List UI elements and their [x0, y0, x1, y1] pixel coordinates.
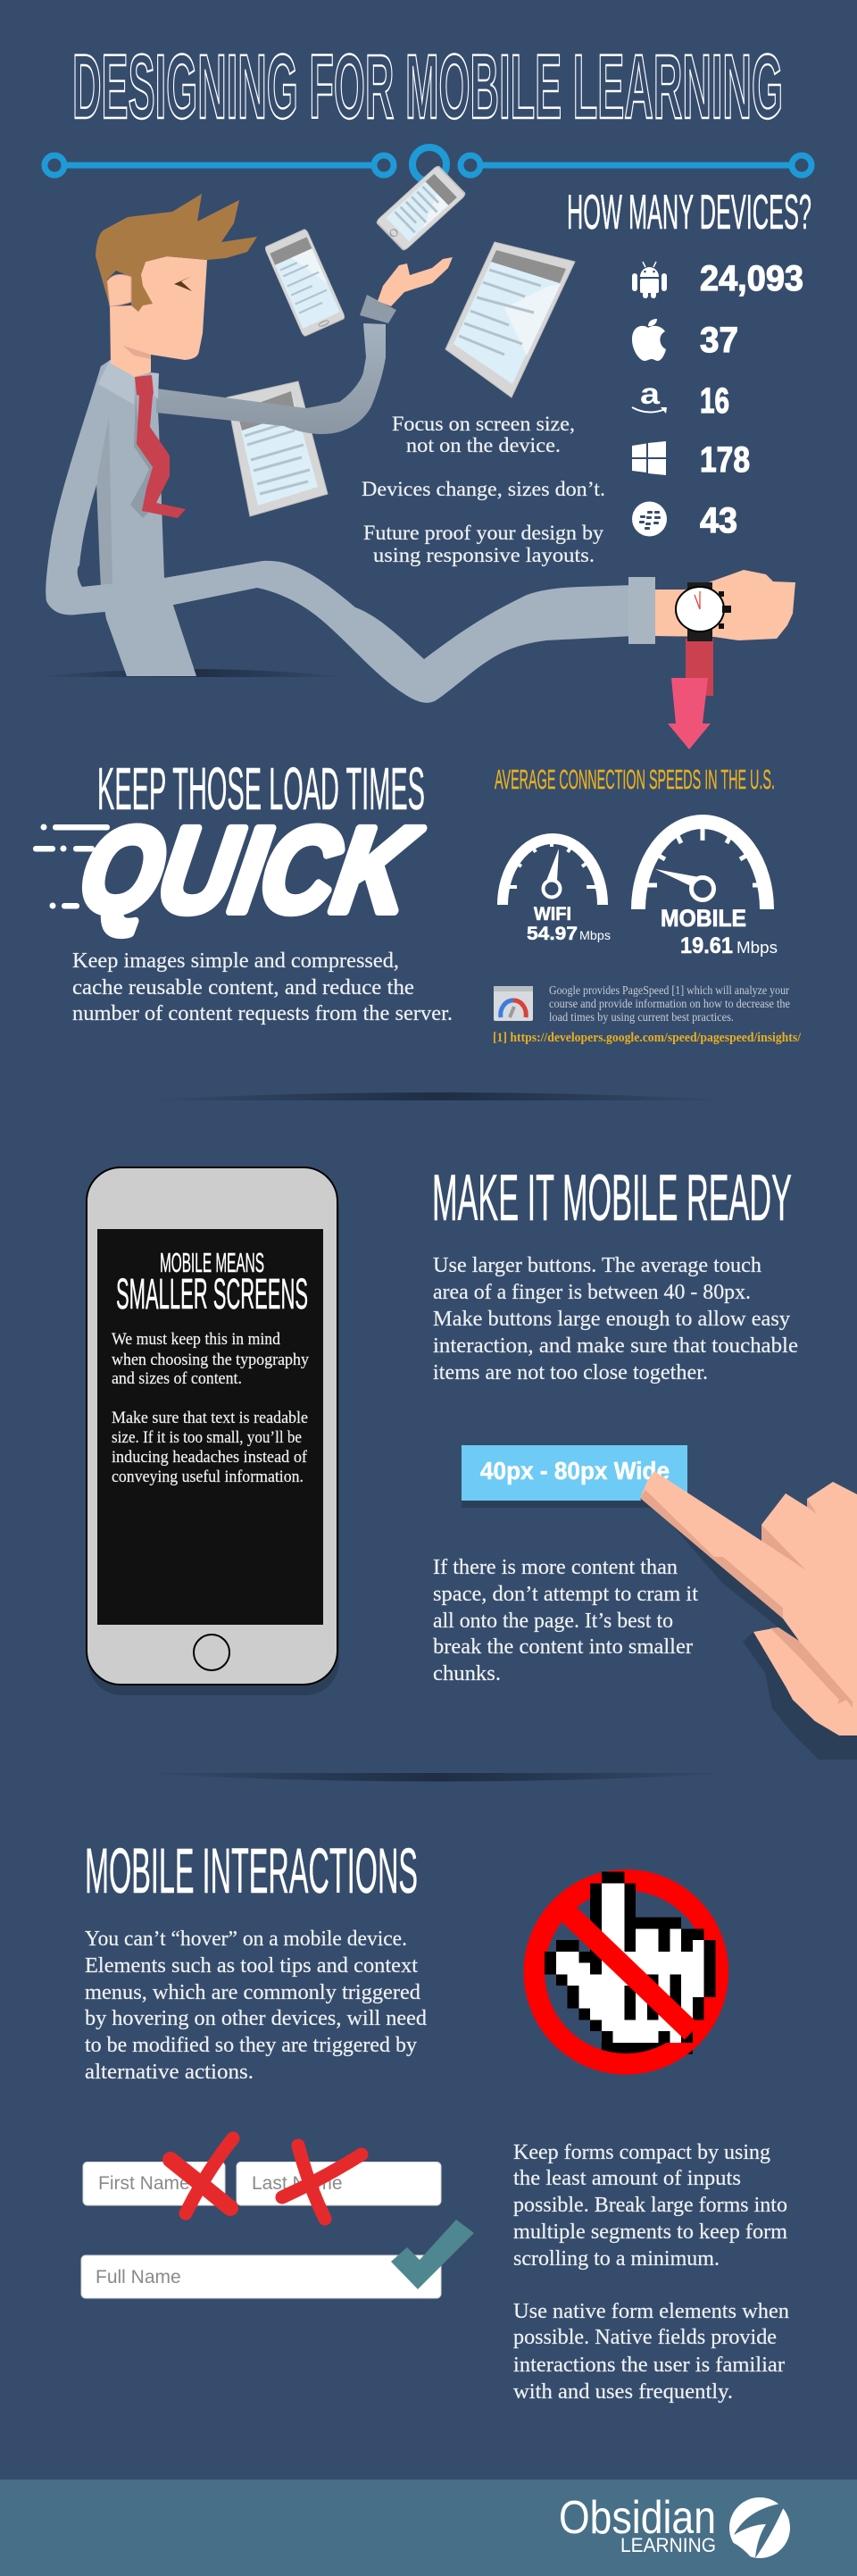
phone screen [97, 1229, 323, 1625]
value: mobile [680, 933, 778, 958]
icon: android [632, 262, 667, 298]
illustration: phone floating left [264, 229, 345, 337]
button example: 40px - 80px Wide [480, 1457, 670, 1485]
text block: larger buttons: Use larger buttons. The average touch [433, 1254, 761, 1277]
infographic canvas: KEEP THOSE LOAD TIMES [97, 756, 425, 823]
text block: hover: menus, which are commonly triggered [85, 1981, 420, 2004]
text block: hover: alternative actions. [85, 2061, 254, 2084]
text block: typography: when choosing the typography [112, 1351, 309, 1369]
text block: readable size: size. If it is too small, you’ll be [112, 1428, 302, 1447]
text block: more content than space: all onto the page. It’s best to [433, 1610, 673, 1633]
input: first name: First Name [98, 2173, 190, 2194]
raised arm [156, 323, 386, 434]
phone mockup [87, 1167, 339, 1695]
wordmark: LEARNING [620, 2534, 716, 2556]
text block: more content than space: break the content into smaller [433, 1635, 693, 1659]
text block: larger buttons: Make buttons large enough to allow easy [433, 1308, 790, 1331]
tie [135, 375, 186, 518]
check mark [391, 2220, 474, 2289]
label: mobile: MOBILE [661, 905, 746, 932]
text block: native form elements: Use native form elements when [513, 2300, 789, 2323]
watch [676, 582, 731, 641]
form example: split name fields [83, 2138, 441, 2219]
link: pagespeed url: [1] https://developers.google.com/speed/pagespeed/insights/ [493, 1031, 802, 1045]
title rule with rings [45, 147, 811, 181]
text block: focus on screen size: not on the device. [406, 434, 561, 456]
text block: native form elements [513, 2300, 789, 2404]
fist [655, 570, 795, 640]
footer logo [559, 2492, 790, 2558]
count: android: 24,093 [700, 259, 803, 298]
text block: larger buttons: items are not too close together. [433, 1361, 708, 1384]
footer band [0, 2480, 857, 2576]
text block: compact forms: multiple segments to keep form [513, 2221, 787, 2244]
watch strap [686, 639, 713, 696]
hand shading [640, 1490, 853, 1708]
text block: native form elements: possible. Native fields provide [513, 2326, 777, 2349]
left arm wrapping to the right [46, 366, 634, 703]
text block: pagespeed note: course and provide information on how to decrease the [549, 998, 790, 1011]
text block: typography [112, 1330, 309, 1388]
count: windows: 178 [700, 440, 750, 480]
input: last name [237, 2162, 441, 2205]
arm cuff [360, 295, 396, 323]
text block: focus on screen size [362, 413, 605, 566]
illustration: tablet behind arm [227, 381, 328, 516]
gauge: mobile [638, 822, 778, 958]
phone mockup: SMALLER SCREENS [116, 1271, 308, 1318]
text block: compact forms: possible. Break large forms into [513, 2194, 787, 2217]
text block: compact forms: scrolling to a minimum. [513, 2247, 720, 2271]
text block: readable size [112, 1409, 308, 1486]
text block: keep images simple: Keep images simple and compressed, [72, 949, 399, 973]
input: last name: Last Name [252, 2173, 343, 2194]
chin shadow [123, 346, 151, 359]
text block: readable size: Make sure that text is readable [112, 1409, 308, 1427]
text block: more content than space: chunks. [433, 1662, 501, 1685]
label: wifi: WIFI [534, 904, 571, 924]
gauge: wifi [503, 838, 611, 944]
value: mobile: 19.61 [680, 933, 733, 958]
text block: focus on screen size: Future proof your design by [363, 522, 604, 544]
hand shadows [640, 1498, 857, 1760]
collar [98, 360, 159, 405]
value: mobile: Mbps [736, 939, 778, 957]
arrow: pointer downward [668, 678, 711, 749]
icon: amazon: a [640, 377, 661, 410]
neck and face [110, 256, 207, 377]
text block: compact forms [513, 2141, 787, 2271]
text block: native form elements: interactions the user is familiar [513, 2354, 785, 2377]
text block: more content than space: space, don’t attempt to cram it [433, 1583, 698, 1606]
text block: typography: and sizes of content. [112, 1369, 242, 1388]
text block: pagespeed note: Google provides PageSpeed [1] which will analyze your [549, 984, 789, 998]
count: blackberry: 43 [700, 501, 737, 540]
text block: larger buttons: area of a finger is between 40 - 80px. [433, 1281, 751, 1304]
infographic canvas: MOBILE INTERACTIONS [85, 1836, 418, 1907]
heading: quick with speed lines: QUICK [71, 803, 428, 937]
icon: windows [632, 441, 666, 475]
form example: full name field: Full Name [96, 2267, 181, 2287]
phone screen: MOBILE MEANS [160, 1247, 264, 1278]
text block: hover [85, 1928, 427, 2084]
form example: full name field [81, 2220, 474, 2298]
text block: readable size: inducing headaches instead of [112, 1448, 308, 1467]
illustration: phone floating top [376, 165, 466, 251]
device counts list [632, 259, 803, 540]
cuff [628, 577, 655, 644]
text block: native form elements: with and uses frequently. [513, 2380, 733, 2404]
text block: pagespeed note [549, 984, 790, 1025]
eye [174, 276, 192, 291]
count: apple: 37 [700, 321, 738, 360]
text block: hover: to be modified so they are triggered by [85, 2034, 417, 2057]
text block: compact forms: Keep forms compact by using [513, 2141, 770, 2164]
red cross: first [171, 2138, 233, 2213]
text block: focus on screen size: using responsive layouts. [373, 544, 595, 566]
text block: pagespeed note: load times by using current best practices. [549, 1011, 734, 1025]
text block: keep images simple: cache reusable content, and reduce the [72, 976, 414, 999]
icon: amazon [632, 377, 667, 414]
text block: keep images simple [72, 949, 453, 1025]
text block: larger buttons [433, 1254, 798, 1384]
value: wifi: Mbps [579, 928, 611, 942]
text block: hover: by hovering on other devices, will need [85, 2007, 427, 2030]
body shading [96, 417, 112, 587]
text block: typography: We must keep this in mind [112, 1330, 280, 1349]
icon: pagespeed [494, 986, 533, 1021]
red cross: last [282, 2145, 362, 2219]
illustration: character body [46, 359, 795, 749]
value: wifi [527, 924, 611, 944]
text block: hover: You can’t “hover” on a mobile device. [85, 1928, 407, 1951]
hair [96, 194, 257, 312]
logo mark [729, 2497, 790, 2558]
value: wifi: 54.97 [527, 924, 578, 944]
text block: focus on screen size: Focus on screen size, [392, 413, 575, 435]
pixel hand [545, 1872, 715, 2043]
text block: keep images simple: number of content requests from the server. [72, 1002, 453, 1025]
ear [107, 274, 131, 306]
section divider shadow [137, 1092, 738, 1100]
hand [640, 1471, 857, 1735]
raised hand [378, 257, 453, 306]
text block: hover: Elements such as tool tips and context [85, 1954, 418, 1978]
illustration: character head and arm [96, 194, 453, 518]
wordmark: Obsidian [559, 2492, 716, 2544]
home button [194, 1635, 229, 1670]
illustration: pointing hand [640, 1471, 857, 1760]
input: first name [83, 2162, 225, 2205]
icon: blackberry [632, 502, 667, 536]
text block: focus on screen size: Devices change, sizes don’t. [362, 478, 605, 500]
button example [462, 1445, 687, 1508]
text block: readable size: conveying useful information. [112, 1468, 304, 1486]
icon: apple [632, 319, 666, 361]
body column [95, 359, 196, 676]
count: amazon: 16 [700, 381, 729, 421]
illustration: tablet floating right [445, 242, 575, 397]
icon: no hover cursor [534, 1872, 718, 2064]
section divider shadow [137, 1773, 738, 1781]
ground shadow under character [33, 669, 350, 677]
text block: more content than space [433, 1556, 698, 1685]
tie shadow [130, 393, 156, 518]
text block: compact forms: the least amount of inputs [513, 2167, 741, 2190]
text block: larger buttons: interaction, and make sure that touchable [433, 1334, 798, 1358]
text block: more content than space: If there is more content than [433, 1556, 678, 1579]
